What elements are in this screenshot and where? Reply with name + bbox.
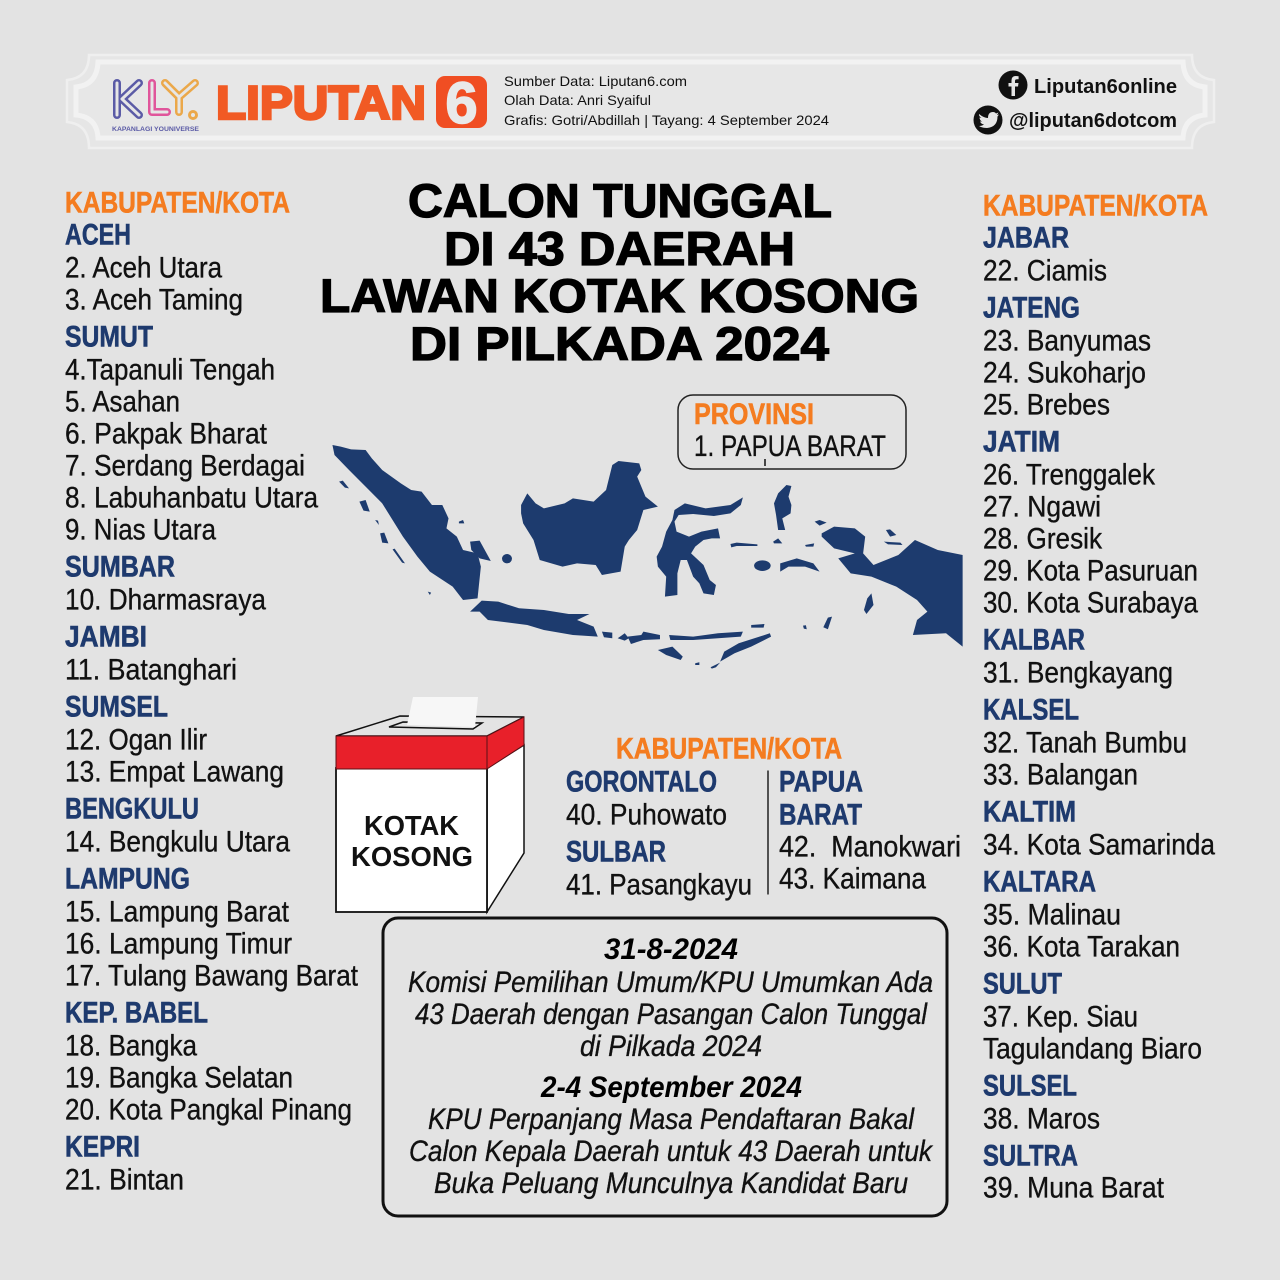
- province: Gorontalo: GORONTALO: [566, 766, 717, 798]
- province: Jatim: 26. Trenggalek: [983, 458, 1156, 492]
- province: Jatim: [983, 426, 1198, 620]
- province: Kepri: 21. Bintan: [65, 1164, 184, 1196]
- province: Papua Barat: [779, 766, 961, 896]
- label: kotak kosong: [351, 810, 473, 872]
- province: Jateng: [983, 292, 1151, 422]
- title: DI PILKADA 2024: [410, 317, 829, 370]
- heading: kabupaten/kota middle: KABUPATEN/KOTA: [616, 732, 842, 766]
- header banner: [67, 55, 1214, 148]
- province: Sumsel: 12. Ogan Ilir: [65, 724, 207, 756]
- province: Jatim: 28. Gresik: [983, 522, 1103, 556]
- province: Lampung: 16. Lampung Timur: [65, 928, 292, 960]
- Sulawesi: [657, 497, 743, 597]
- province: Sultra: SULTRA: [983, 1140, 1078, 1172]
- social: twitter: @liputan6dotcom: [1009, 110, 1177, 132]
- province: Kaltara: 35. Malinau: [983, 898, 1121, 932]
- province: Kaltara: KALTARA: [983, 866, 1096, 898]
- province: Jatim: 27. Ngawi: [983, 490, 1101, 524]
- province: Kalsel: 33. Balangan: [983, 758, 1138, 792]
- text: 31-8-2024: di Pilkada 2024: [580, 1030, 762, 1063]
- province: Kaltim: 34. Kota Samarinda: [983, 828, 1215, 862]
- logo: KLY: [112, 83, 200, 133]
- province: Kalbar: 31. Bengkayang: [983, 656, 1173, 690]
- province: Jateng: 24. Sukoharjo: [983, 356, 1146, 390]
- province: Jabar: 22. Ciamis: [983, 254, 1107, 288]
- province: Sumut: 8. Labuhanbatu Utara: [65, 482, 318, 514]
- province: Kep. Babel: 18. Bangka: [65, 1030, 197, 1062]
- province: Sulbar: SULBAR: [566, 836, 666, 868]
- province: Sumbar: 10. Dharmasraya: [65, 584, 266, 616]
- text: 31-8-2024: [408, 933, 933, 1063]
- map of Indonesia: [332, 445, 963, 669]
- province: Kep. Babel: 20. Kota Pangkal Pinang: [65, 1094, 352, 1126]
- text: 31-8-2024: 31-8-2024: [604, 933, 738, 966]
- title: [320, 174, 919, 370]
- small islands: [470, 541, 491, 561]
- province: Sulbar: [566, 836, 752, 902]
- social: facebook: Liputan6online: [1034, 76, 1177, 98]
- province: Gorontalo: 40. Puhowato: [566, 798, 727, 832]
- province: Papua Barat: 42. Manokwari: [779, 830, 961, 864]
- panel: timeline callout: [383, 918, 947, 1216]
- panel: left list of kabupaten/kota: [65, 186, 359, 1196]
- province: Aceh: 3. Aceh Taming: [65, 284, 243, 316]
- logo: Liputan 6: LIPUTAN: [216, 76, 426, 129]
- province: Bengkulu: [65, 792, 290, 858]
- province: Aceh: 2. Aceh Utara: [65, 252, 222, 284]
- province: Sumsel: 13. Empat Lawang: [65, 756, 284, 788]
- logo: Liputan 6: 6: [445, 71, 478, 136]
- province: Kaltara: 36. Kota Tarakan: [983, 930, 1180, 964]
- icon: ballot box: [336, 697, 524, 912]
- province: Sumut: 4.Tapanuli Tengah: [65, 354, 275, 386]
- province: Bengkulu: 14. Bengkulu Utara: [65, 826, 290, 858]
- province: Jatim: JATIM: [983, 426, 1060, 458]
- province: Gorontalo: [566, 766, 727, 832]
- heading: kabupaten/kota left: KABUPATEN/KOTA: [65, 186, 290, 220]
- province: Aceh: ACEH: [65, 218, 131, 252]
- province: Papua Barat: BARAT: [779, 798, 862, 832]
- text: 31-8-2024: 43 Daerah dengan Pasangan Calon Tunggal: [415, 998, 928, 1031]
- province: Sumut: [65, 320, 318, 546]
- province: Jambi: 11. Batanghari: [65, 654, 237, 686]
- source credits: [504, 73, 829, 128]
- province: Jambi: [65, 620, 237, 686]
- text: 31-8-2024: Komisi Pemilihan Umum/KPU Umumkan Ada: [408, 966, 933, 999]
- source credits: Olah Data: Anri Syaiful: [504, 92, 651, 108]
- province: Jabar: [983, 222, 1107, 288]
- callout: provinsi: PROVINSI: [694, 398, 814, 431]
- Papua: [822, 527, 963, 647]
- province: Jatim: 30. Kota Surabaya: [983, 586, 1198, 620]
- Java: [470, 601, 598, 637]
- province: Kep. Babel: [65, 996, 352, 1126]
- callout: provinsi: [678, 395, 906, 469]
- province: Sulbar: 41. Pasangkayu: [566, 868, 752, 902]
- province: Sumbar: SUMBAR: [65, 550, 175, 584]
- province: Sulsel: SULSEL: [983, 1070, 1077, 1102]
- text: 2-4 September 2024: [409, 1071, 934, 1200]
- province: Jambi: JAMBI: [65, 620, 147, 654]
- province: Papua Barat: 43. Kaimana: [779, 862, 926, 896]
- source credits: Sumber Data: Liputan6.com: [504, 73, 687, 89]
- province: Kalsel: KALSEL: [983, 694, 1079, 726]
- province: Kepri: [65, 1130, 184, 1196]
- province: Sulut: 37. Kep. Siau: [983, 1000, 1138, 1034]
- province: Bengkulu: BENGKULU: [65, 792, 199, 826]
- province: Kep. Babel: KEP. BABEL: [65, 996, 208, 1030]
- Borneo: [521, 461, 658, 575]
- province: Sumut: 9. Nias Utara: [65, 514, 216, 546]
- province: Papua Barat: PAPUA: [779, 766, 863, 798]
- text: 2-4 September 2024: 2-4 September 2024: [540, 1071, 802, 1104]
- province: Sumut: 6. Pakpak Bharat: [65, 418, 268, 450]
- province: Kepri: KEPRI: [65, 1130, 140, 1164]
- province: Jabar: JABAR: [983, 222, 1069, 254]
- province: Kalbar: [983, 624, 1173, 690]
- province: Sulut: SULUT: [983, 968, 1062, 1000]
- heading: kabupaten/kota right: KABUPATEN/KOTA: [983, 190, 1208, 222]
- social: twitter: [974, 106, 1177, 134]
- province: Sumbar: [65, 550, 266, 616]
- panel: right list of kabupaten/kota: [983, 190, 1215, 1204]
- province: Kaltim: KALTIM: [983, 796, 1076, 828]
- text: 2-4 September 2024: Buka Peluang Munculnya Kandidat Baru: [434, 1167, 908, 1200]
- label: kotak kosong: KOSONG: [351, 841, 473, 872]
- province: Kaltara: [983, 866, 1180, 964]
- title: CALON TUNGGAL: [408, 174, 832, 227]
- logo: KLY: KAPANLAGI YOUNIVERSE: [112, 126, 200, 133]
- province: Jateng: 25. Brebes: [983, 388, 1110, 422]
- province: Kaltim: [983, 796, 1215, 862]
- callout: provinsi: 1. PAPUA BARAT: [694, 430, 886, 463]
- label: kotak kosong: KOTAK: [364, 810, 459, 841]
- logo: Liputan 6: [216, 71, 487, 136]
- province: Sumsel: [65, 690, 284, 788]
- province: Sultra: 39. Muna Barat: [983, 1172, 1165, 1204]
- social: facebook: [998, 70, 1177, 100]
- province: Lampung: 17. Tulang Bawang Barat: [65, 960, 359, 992]
- province: Jateng: JATENG: [983, 292, 1080, 324]
- province: Sulsel: 38. Maros: [983, 1102, 1100, 1136]
- province: Lampung: 15. Lampung Barat: [65, 896, 290, 928]
- panel: middle kabupaten/kota: [566, 732, 961, 902]
- province: Lampung: [65, 862, 359, 992]
- source credits: Grafis: Gotri/Abdillah | Tayang: 4 September 2024: [504, 112, 829, 128]
- Sumatra: [332, 445, 481, 600]
- province: Jatim: 29. Kota Pasuruan: [983, 554, 1198, 588]
- text: 2-4 September 2024: Calon Kepala Daerah untuk 43 Daerah untuk: [409, 1135, 934, 1168]
- province: Sumsel: SUMSEL: [65, 690, 168, 724]
- province: Sultra: [983, 1140, 1165, 1204]
- Halmahera: [774, 485, 791, 530]
- province: Sumut: 7. Serdang Berdagai: [65, 450, 305, 482]
- province: Aceh: [65, 218, 243, 316]
- title: DI 43 DAERAH: [444, 222, 795, 275]
- province: Kalsel: [983, 694, 1187, 792]
- title: LAWAN KOTAK KOSONG: [320, 269, 919, 322]
- province: Kep. Babel: 19. Bangka Selatan: [65, 1062, 293, 1094]
- province: Sulut: [983, 968, 1202, 1066]
- province: Jateng: 23. Banyumas: [983, 324, 1151, 358]
- province: Sulsel: [983, 1070, 1100, 1136]
- province: Sulut: Tagulandang Biaro: [983, 1032, 1202, 1066]
- province: Kalsel: 32. Tanah Bumbu: [983, 726, 1187, 760]
- province: Lampung: LAMPUNG: [65, 862, 190, 896]
- province: Sumut: 5. Asahan: [65, 386, 180, 418]
- text: 2-4 September 2024: KPU Perpanjang Masa Pendaftaran Bakal: [428, 1103, 915, 1136]
- province: Sumut: SUMUT: [65, 320, 153, 354]
- province: Kalbar: KALBAR: [983, 624, 1085, 656]
